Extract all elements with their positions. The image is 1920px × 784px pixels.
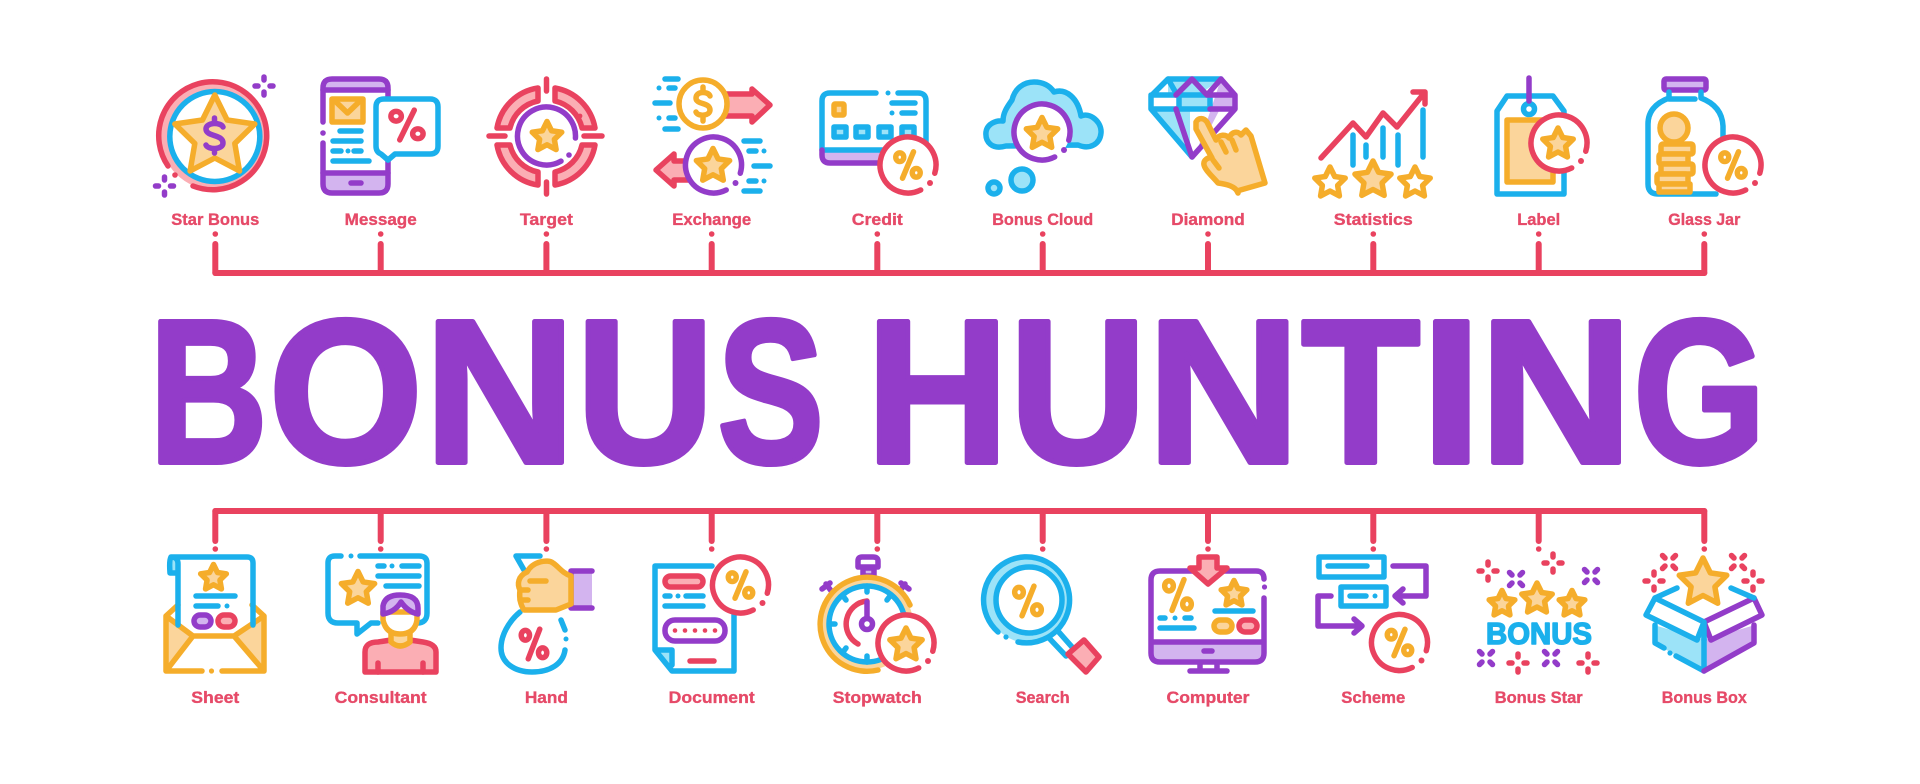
connector stem [544,231,549,273]
connector stem [709,511,714,552]
label: Scheme [1341,688,1405,707]
panel: Document [655,511,778,707]
title: B [149,278,268,506]
icon: bonus box [1645,556,1762,671]
icon: scheme [1318,557,1437,680]
icon: star bonus [156,77,273,195]
connector stem [1370,511,1376,552]
connector stem [709,231,714,273]
title: S [718,278,824,506]
label: Credit [852,210,903,229]
title: G [1633,278,1766,506]
label: Star Bonus [171,210,259,229]
connector stem [1702,511,1707,552]
panel: Target [489,79,602,273]
label: Document [669,688,755,707]
title: N [1147,278,1300,506]
icon: bonus cloud [986,82,1101,194]
title: U [576,278,714,506]
label: Diamond [1171,210,1245,229]
label: Consultant [335,688,427,707]
connector stem [1702,231,1707,273]
icon: credit card [822,90,946,203]
panel: Computer [1151,511,1267,707]
panel: Credit [822,90,946,273]
label: Exchange [672,210,751,229]
connector stem [1536,231,1541,273]
connector stem [874,231,880,273]
panel: Statistics [1315,92,1430,273]
panel: Consultant [328,511,436,707]
icon: glass jar [1648,79,1771,203]
label: Target [520,210,573,229]
title: N [424,278,576,506]
label: Computer [1166,688,1250,707]
panel: Star Bonus [156,77,273,273]
connector: top rail [215,270,1704,276]
title: N [1480,278,1633,506]
icon: computer [1151,557,1267,671]
title: T [1301,278,1420,506]
icon: exchange [655,79,770,203]
connector stem [1205,231,1211,273]
panel: Exchange [655,79,770,273]
icon: message [320,79,438,193]
panel: Search [984,511,1099,707]
panel: Message [320,79,438,273]
title: I [1421,278,1482,506]
label: Hand [525,688,568,707]
title: U [1010,278,1146,506]
icon text: BONUS: BONUS [1486,616,1592,651]
icon: stopwatch [820,557,944,681]
connector stem [874,511,880,552]
connector stem [1040,511,1045,552]
label: Stopwatch [833,688,922,707]
panel: Stopwatch [820,511,944,707]
label: Bonus Cloud [992,210,1093,229]
connector: bottom rail [215,508,1704,514]
panel: Bonus Star [1479,511,1598,707]
connector stem [544,511,549,552]
panel: Hand [501,511,592,707]
icon: diamond and hand [1151,79,1265,193]
panel: Bonus Cloud [986,82,1101,273]
label: Search [1016,688,1070,707]
label: Message [345,210,417,229]
panel: Label [1497,78,1597,273]
label: Glass Jar [1668,210,1741,229]
icon: magnifier [984,557,1099,672]
connector stem [212,511,218,552]
connector stem [1040,231,1045,273]
panel: Scheme [1318,511,1437,707]
connector stem [212,231,218,273]
connector stem [1370,231,1376,273]
connector stem [1536,511,1541,552]
panel: Diamond [1151,79,1265,273]
panel: Sheet [166,511,264,707]
label: Sheet [191,688,240,707]
icon: tag label [1497,78,1597,194]
label: Bonus Box [1662,688,1747,707]
icon: bonus stars [1479,554,1598,672]
panel: Glass Jar [1648,79,1771,273]
label: Bonus Star [1495,688,1583,707]
connector stem [1205,511,1211,552]
title: O [269,278,423,506]
label: Statistics [1334,210,1413,229]
connector stem [378,511,384,552]
panel: Bonus Box [1645,511,1762,707]
icon: consultant [328,554,436,672]
icon: envelope sheet [166,557,264,674]
icon: statistics [1315,92,1430,196]
icon: target [489,79,602,194]
label: Label [1517,210,1560,229]
icon: hand with bag [501,556,592,672]
icon: document [655,547,778,671]
title: H [866,278,1009,506]
connector stem [378,231,384,273]
